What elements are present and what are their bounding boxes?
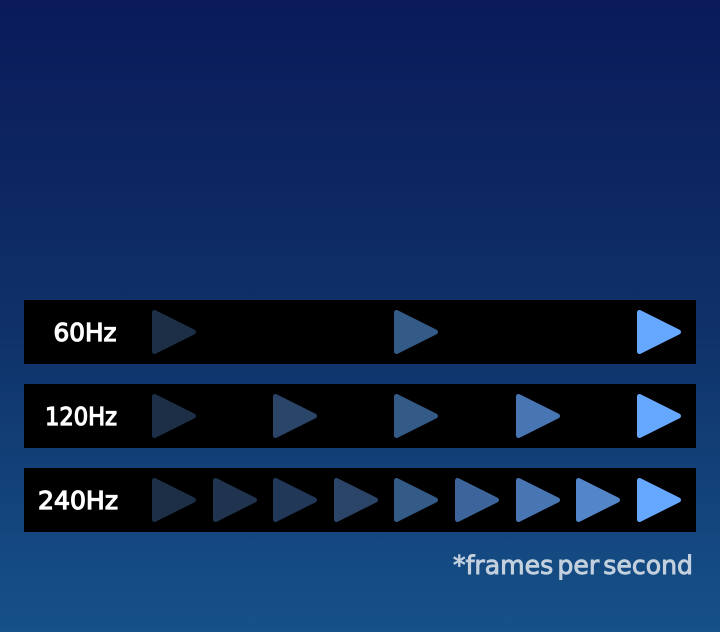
frame arrows: 60Hz: [154, 312, 678, 352]
frame arrows: 120Hz: [154, 396, 678, 436]
row: 60Hz: [24, 300, 696, 364]
row: 120Hz: [24, 384, 696, 448]
label: 120Hz: 120Hz: [45, 402, 117, 431]
bar: 60Hz: [24, 300, 696, 364]
label: 240Hz: 240Hz: [38, 486, 118, 515]
frame arrows: 240Hz: [154, 480, 678, 520]
footnote: *frames per second: [453, 551, 693, 581]
bar: 120Hz: [24, 384, 696, 448]
row: 240Hz: [24, 468, 696, 532]
label: 60Hz: 60Hz: [54, 318, 116, 347]
bar: 240Hz: [24, 468, 696, 532]
